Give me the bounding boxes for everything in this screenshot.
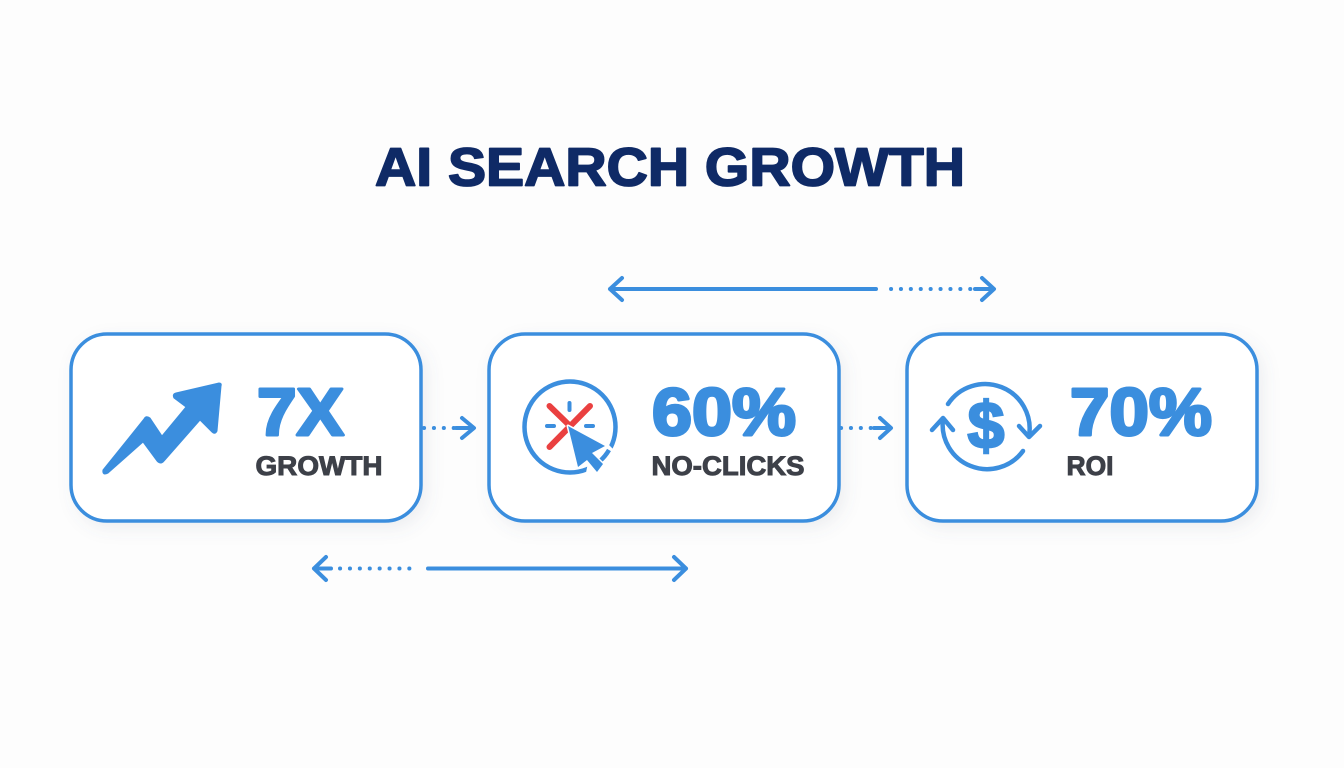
arrow: growth to no-clicks	[424, 418, 474, 438]
icon: dollar cycle	[932, 384, 1040, 469]
arrow: no-clicks to ROI	[841, 418, 891, 438]
panel: no-clicks	[489, 334, 839, 521]
stat: 60%: 60%	[652, 375, 796, 450]
panel: growth	[71, 334, 421, 521]
label: growth: GROWTH	[256, 451, 382, 481]
arrow: top bidirectional	[610, 278, 994, 300]
stat: 70%: 70%	[1070, 375, 1212, 450]
icon: dollar cycle: $	[968, 388, 1004, 462]
icon: rising arrow	[103, 383, 221, 474]
icon: cursor and cross in circle	[524, 382, 622, 478]
panel: ROI	[907, 334, 1257, 521]
title: AI SEARCH GROWTH	[375, 138, 965, 198]
label: ROI: ROI	[1066, 451, 1114, 481]
label: no-clicks: NO-CLICKS	[652, 451, 804, 481]
stat: 7X: 7X	[257, 375, 344, 450]
arrow: bottom bidirectional	[314, 557, 686, 580]
